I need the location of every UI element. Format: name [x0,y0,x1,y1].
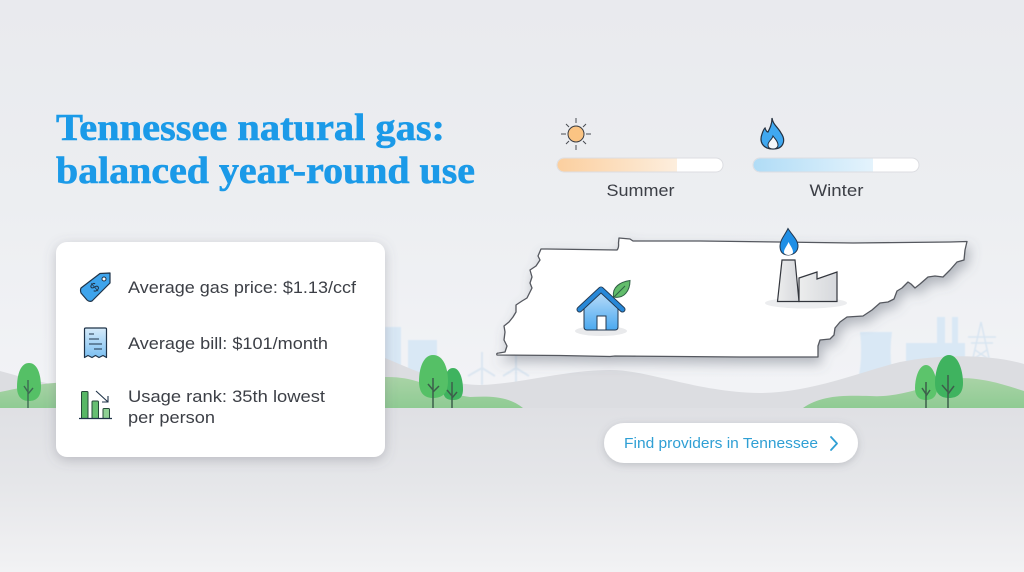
map: Tennessee outline [497,238,967,357]
summer gauge: Summer [606,181,675,200]
button: find providers [604,423,858,463]
tree: far left [17,363,41,408]
icon: house with leaf [575,280,630,336]
stat: usage rank [128,387,325,427]
trees: centre pair [419,355,463,408]
icon: sun [561,118,591,150]
gray hills [0,356,1024,408]
background skyline: left buildings and wind turbines [385,327,529,385]
summer gauge [557,158,723,200]
icon: factory with gas flame [765,228,847,308]
icon: price tag: $ [87,279,103,295]
icon: receipt [84,328,106,358]
title [56,107,475,192]
stat: average gas price: Average gas price: $1.13/ccf [128,278,356,297]
green hills [0,377,1024,408]
button: find providers: Find providers in Tennessee [624,435,818,452]
title: balanced year-round use [56,150,475,192]
winter gauge: Winter [810,181,864,200]
stat: usage rank: per person [128,408,215,427]
title: Tennessee natural gas: [56,107,445,149]
stat: average bill: Average bill: $101/month [128,334,328,353]
trees: right pair [915,355,963,408]
background skyline: right power plant and pylon [854,317,996,395]
icon: flame [761,118,784,149]
panel: key stats [56,242,385,457]
icon: falling bar chart [79,391,112,418]
icon: price tag [80,273,110,301]
stat: usage rank: Usage rank: 35th lowest [128,387,325,406]
winter gauge [753,158,919,200]
